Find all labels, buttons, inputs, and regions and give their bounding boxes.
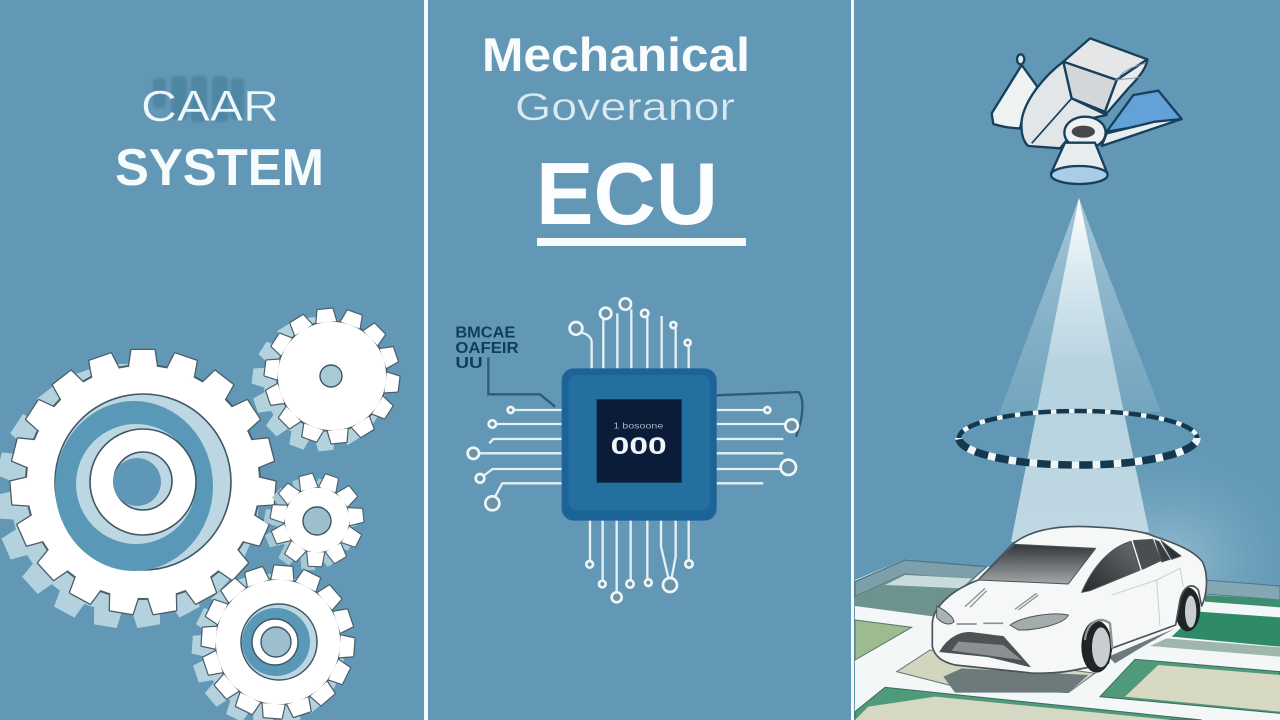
icon: satellite — [992, 38, 1182, 184]
panel: satellite and car — [855, 38, 1280, 720]
icon: small middle gear — [254, 464, 374, 580]
screen small text: 1 bosoone — [613, 421, 664, 430]
circuit traces — [479, 309, 785, 592]
icon: large gear — [0, 350, 276, 629]
heading: Governor: Goveranor — [515, 86, 735, 129]
light beam outer — [999, 198, 1161, 414]
sky glow — [1020, 430, 1280, 690]
heading: CAAR: CAAR — [141, 82, 279, 131]
chip body — [562, 368, 717, 521]
heading: Mechanical: Mechanical — [482, 28, 750, 81]
trace terminals — [468, 298, 798, 602]
heading: SYSTEM: SYSTEM — [115, 139, 324, 197]
dashed ring — [959, 411, 1197, 465]
annotation label — [455, 324, 519, 372]
panel: ECU — [455, 28, 802, 602]
car shadow — [943, 628, 1175, 693]
icon: lower gear — [187, 561, 359, 720]
annotation label: BMCAE — [455, 324, 515, 341]
panel: car system gears — [0, 76, 406, 720]
underline — [537, 238, 746, 246]
divider: right — [851, 0, 854, 720]
divider: left — [424, 0, 428, 720]
annotation label: UU — [455, 355, 483, 372]
annotation label: OAFEIR — [455, 340, 519, 357]
chip screen — [597, 399, 682, 483]
screen digits: 000 — [611, 433, 667, 460]
chip highlight — [568, 375, 710, 510]
light beam inner — [1011, 198, 1149, 542]
map and car scene — [855, 526, 1280, 720]
chip diagram — [455, 298, 802, 602]
heading: ECU: ECU — [536, 144, 718, 243]
dark leader wires — [488, 357, 802, 437]
map ground — [855, 559, 1280, 720]
icon: car — [932, 526, 1207, 673]
icon: upper right gear — [245, 302, 406, 458]
